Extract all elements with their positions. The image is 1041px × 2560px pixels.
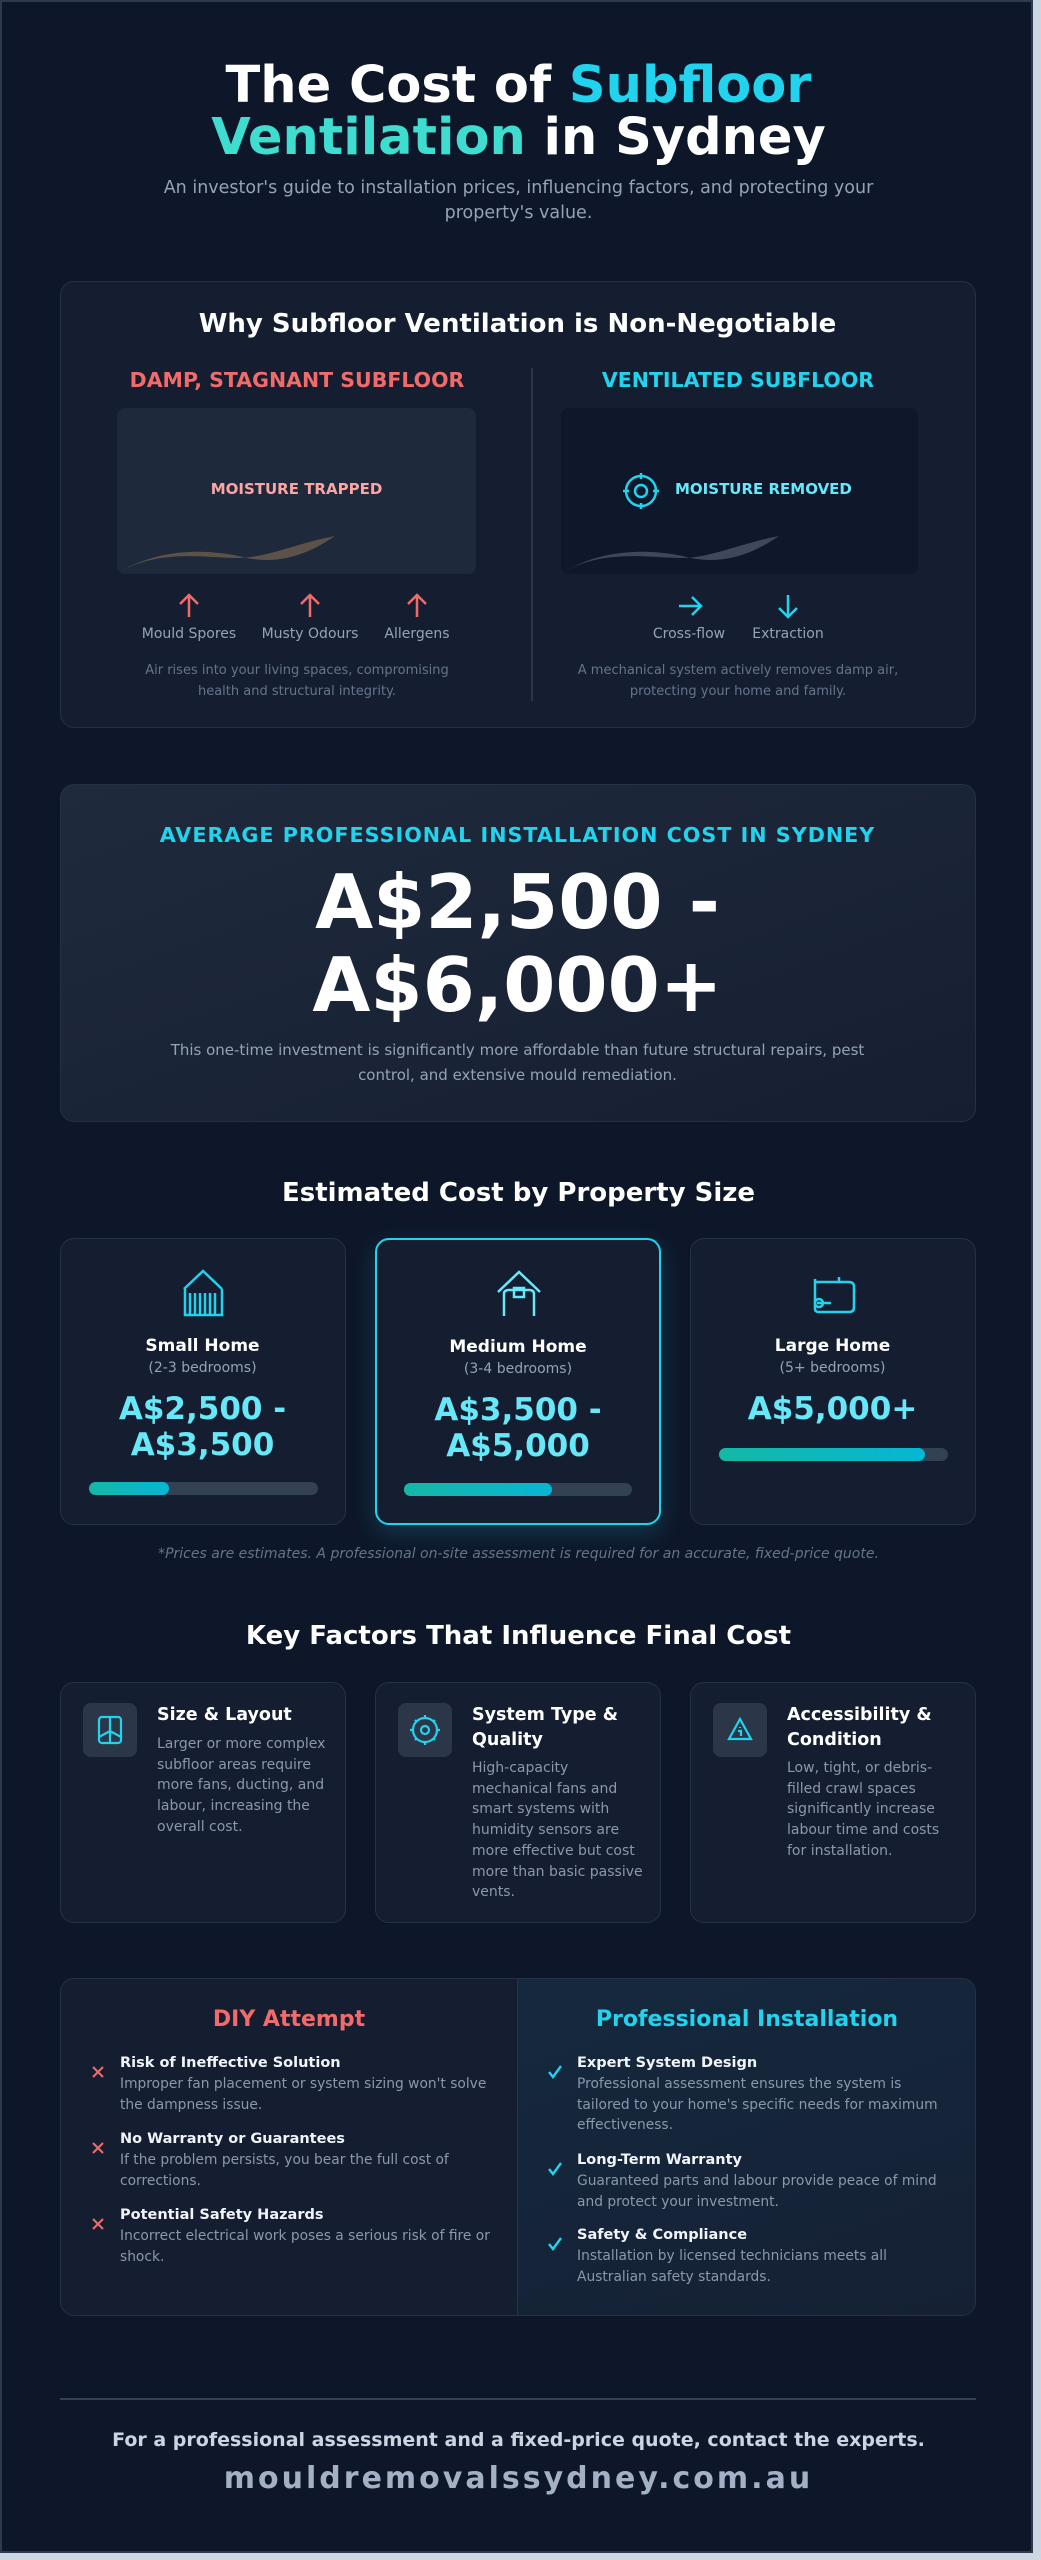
cost heading: AVERAGE PROFESSIONAL INSTALLATION COST IN SYDNEY <box>160 823 875 847</box>
big price: A$2,500 - <box>315 858 720 946</box>
Professional list: Guaranteed parts and labour provide peace of mind and protect your investment. <box>577 2173 937 2210</box>
section heading: key factors: Key Factors That Influence Final Cost <box>246 1621 791 1651</box>
DIY list: Potential Safety Hazards <box>120 2207 324 2223</box>
Professional list: Expert System Design <box>577 2055 757 2071</box>
Professional list: Long-Term Warranty <box>577 2152 742 2168</box>
arrows: damp effects <box>142 593 450 642</box>
arrows: damp effects: Mould Spores <box>142 626 236 642</box>
arrows: ventilated actions: Extraction <box>752 626 824 642</box>
card: system type <box>375 1682 661 1923</box>
icon: warning <box>713 1703 767 1757</box>
icon: small house <box>183 1269 224 1316</box>
footer website: mouldremovalssydney.com.au <box>224 2461 813 2496</box>
card: system type: System Type & Quality <box>472 1705 618 1750</box>
DIY list: If the problem persists, you bear the full cost of corrections. <box>120 2152 449 2189</box>
arrows: ventilated actions: Cross-flow <box>653 626 725 642</box>
text: damp description: Air rises into your living spaces, compromising health and structural integrity. <box>145 663 449 699</box>
Professional list <box>548 2055 938 2285</box>
icon: medium house <box>497 1270 541 1316</box>
panel heading: Why Subfloor Ventilation is Non-Negotiable <box>199 309 836 339</box>
card: large home <box>690 1238 976 1525</box>
icon: large home <box>814 1277 856 1314</box>
card: medium home: Medium Home <box>449 1337 587 1357</box>
icon: gear <box>398 1703 452 1757</box>
Professional list: Installation by licensed technicians meets all Australian safety standards. <box>577 2248 887 2285</box>
panel: average cost <box>60 784 976 1122</box>
illustration: moisture removed <box>561 408 918 574</box>
panel: why ventilation <box>60 281 976 728</box>
card: size & layout <box>60 1682 346 1923</box>
Professional list: Safety & Compliance <box>577 2227 747 2243</box>
illustration: moisture removed: MOISTURE REMOVED <box>675 480 852 498</box>
professional column background <box>517 1979 977 2317</box>
card: small home: A$3,500 <box>131 1427 274 1463</box>
footnote: *Prices are estimates. A professional on-site assessment is required for an accurate, fixed-price quote. <box>158 1546 879 1562</box>
card: small home <box>60 1238 346 1525</box>
card: medium home <box>375 1238 661 1525</box>
DIY list: Incorrect electrical work poses a serious risk of fire or shock. <box>120 2228 490 2265</box>
title: Ventilation in Sydney <box>211 108 826 167</box>
text: ventilated description: A mechanical system actively removes damp air, protecting your home and family. <box>578 663 898 699</box>
card: small home: (2-3 bedrooms) <box>148 1360 257 1376</box>
section heading: estimated cost: Estimated Cost by Property Size <box>282 1178 755 1208</box>
illustration: moisture trapped <box>117 408 476 574</box>
card: large home: A$5,000+ <box>748 1391 917 1427</box>
Professional heading: Professional Installation <box>596 2007 898 2032</box>
title: The Cost of Subfloor <box>226 56 811 115</box>
illustration: moisture trapped: MOISTURE TRAPPED <box>211 480 382 498</box>
title <box>211 56 826 167</box>
DIY list: Improper fan placement or system sizing won't solve the dampness issue. <box>120 2076 486 2113</box>
arrows: damp effects: Allergens <box>384 626 450 642</box>
card: system type: High-capacity mechanical fans and smart systems with humidity sensors are more effective but cost more than basic passive vents. <box>472 1760 643 1900</box>
footer call to action: For a professional assessment and a fixed-price quote, contact the experts. <box>112 2429 925 2451</box>
card: medium home: A$5,000 <box>446 1428 590 1464</box>
DIY heading: DIY Attempt <box>213 2007 365 2032</box>
big price: A$6,000+ <box>312 941 723 1029</box>
card: accessibility: Low, tight, or debris-filled crawl spaces significantly increase labour time and costs for installation. <box>787 1760 939 1859</box>
big price <box>312 858 723 1029</box>
DIY list: Risk of Ineffective Solution <box>120 2055 341 2071</box>
DIY list: No Warranty or Guarantees <box>120 2131 345 2147</box>
column heading: damp: DAMP, STAGNANT SUBFLOOR <box>130 368 464 392</box>
icon: layout <box>83 1703 137 1757</box>
card: size & layout: Larger or more complex subfloor areas require more fans, ducting, and labour, increasing the overall cost. <box>157 1736 325 1835</box>
DIY list <box>92 2055 490 2265</box>
card: small home: Small Home <box>145 1336 260 1356</box>
column heading: ventilated: VENTILATED SUBFLOOR <box>602 368 874 392</box>
card: medium home: A$3,500 - <box>434 1392 602 1428</box>
panel: DIY vs professional <box>60 1978 976 2316</box>
card: large home: (5+ bedrooms) <box>780 1360 885 1376</box>
arrows: ventilated actions <box>653 595 824 642</box>
arrows: damp effects: Musty Odours <box>262 626 358 642</box>
cost description: This one-time investment is significantly more affordable than future structural repairs, pest control, and extensive mould remediation. <box>171 1041 864 1084</box>
divider <box>531 368 532 701</box>
card: small home: A$2,500 - <box>119 1391 286 1427</box>
subtitle: An investor's guide to installation prices, influencing factors, and protecting your property's value. <box>164 178 873 223</box>
card: accessibility <box>690 1682 976 1923</box>
card: large home: Large Home <box>775 1336 890 1356</box>
Professional list: Professional assessment ensures the system is tailored to your home's specific needs for maximum effectiveness. <box>577 2076 938 2133</box>
card: size & layout: Size & Layout <box>157 1705 292 1725</box>
card: accessibility: Accessibility & Condition <box>787 1705 932 1750</box>
card: medium home: (3-4 bedrooms) <box>464 1361 572 1377</box>
